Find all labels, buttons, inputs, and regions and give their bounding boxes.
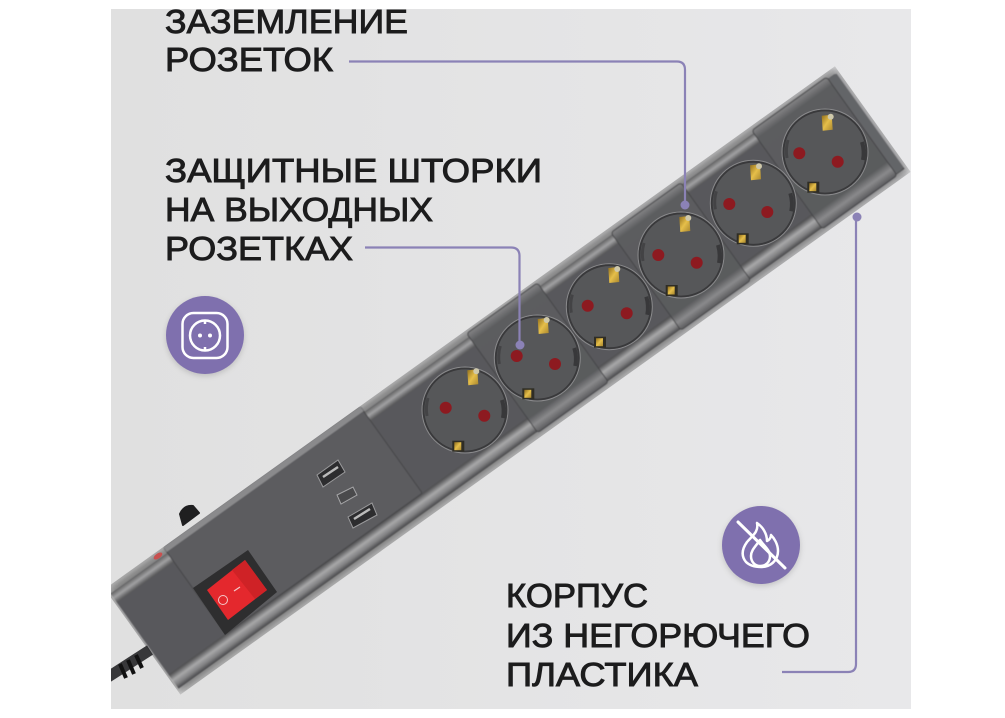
callout line: housing: [782, 212, 862, 672]
end cap: [828, 74, 902, 172]
socket 2: [710, 160, 796, 246]
icon: socket: [166, 296, 244, 376]
cover plate: socket 5: [467, 283, 608, 433]
icon: no fire: [722, 506, 800, 586]
socket 6: [422, 367, 508, 453]
heading: shutters: ЗАЩИТНЫЕ ШТОРКИ: [165, 152, 542, 189]
heading: housing: ПЛАСТИКА: [506, 656, 698, 693]
indicator LED: [154, 552, 162, 560]
heading: housing: [506, 577, 810, 693]
callout line: grounding: [349, 62, 690, 210]
background panel: [111, 9, 911, 709]
side button: [180, 506, 199, 525]
callout line: shutters: [365, 248, 524, 350]
power cable: [105, 650, 150, 679]
heading: grounding: РОЗЕТОК: [165, 41, 334, 78]
USB ports: [317, 460, 377, 528]
heading: shutters: РОЗЕТКАХ: [165, 230, 353, 267]
socket 4: [566, 264, 652, 350]
heading: grounding: [166, 9, 407, 72]
heading: grounding: ЗАЗЕМЛЕНИЕ: [165, 3, 408, 40]
rocker switch: [193, 550, 277, 635]
heading: housing: КОРПУС: [506, 577, 648, 614]
power strip: [105, 66, 911, 695]
socket 5: [494, 315, 580, 401]
heading: shutters: НА ВЫХОДНЫХ: [165, 191, 433, 228]
socket 3: [638, 212, 724, 298]
heading: housing: ИЗ НЕГОРЮЧЕГО: [506, 617, 810, 654]
head plate with switch and USB: [163, 406, 422, 608]
cover plate: socket 3: [611, 183, 751, 330]
cover plate: socket 1: [752, 77, 897, 229]
heading: shutters: [165, 152, 542, 267]
socket 1: [782, 109, 868, 195]
strip body: [105, 66, 911, 695]
